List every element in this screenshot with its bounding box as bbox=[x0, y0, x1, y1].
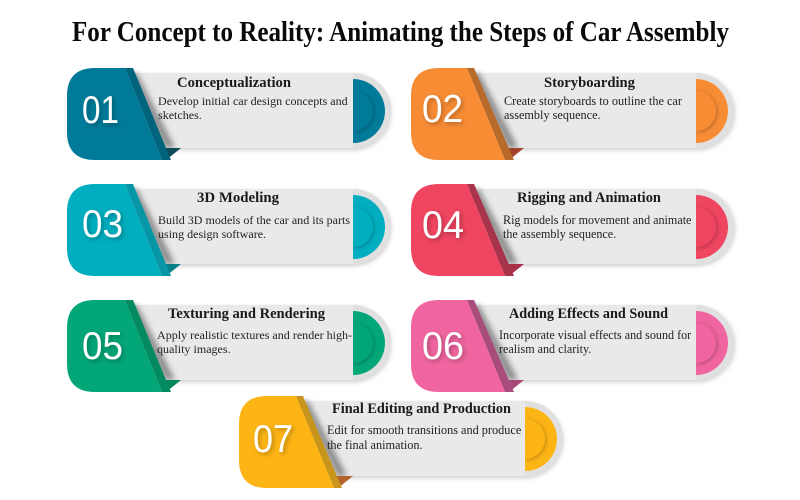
heading: Storyboarding bbox=[544, 75, 636, 91]
heading: Adding Effects and Sound bbox=[509, 306, 668, 322]
heading: Texturing and Rendering bbox=[168, 306, 326, 322]
description: sketches. bbox=[158, 108, 202, 122]
card 01: Conceptualization bbox=[67, 68, 391, 160]
card 02: Storyboarding bbox=[411, 68, 734, 160]
card 03: 3D Modeling bbox=[67, 184, 391, 276]
card 06: Adding Effects and Sound bbox=[411, 300, 734, 392]
card 05: Texturing and Rendering bbox=[67, 300, 391, 392]
step number: 03 bbox=[82, 203, 123, 246]
card 07: Final Editing and Production bbox=[239, 396, 563, 488]
card 04: Rigging and Animation bbox=[411, 184, 734, 276]
description: Build 3D models of the car and its parts bbox=[158, 213, 350, 227]
step number: 04 bbox=[422, 204, 464, 247]
step number: 01 bbox=[82, 89, 119, 132]
heading: 3D Modeling bbox=[197, 190, 280, 206]
step number: 02 bbox=[422, 88, 463, 131]
step number: 05 bbox=[82, 325, 123, 368]
step number: 07 bbox=[253, 418, 293, 461]
description: Create storyboards to outline the car bbox=[504, 94, 682, 108]
description: Incorporate visual effects and sound for bbox=[499, 328, 691, 342]
description: assembly sequence. bbox=[504, 108, 601, 122]
description: Develop initial car design concepts and bbox=[158, 94, 348, 108]
description: quality images. bbox=[157, 342, 231, 356]
step number: 06 bbox=[422, 325, 464, 368]
description: Edit for smooth transitions and produce bbox=[327, 423, 521, 437]
description: realism and clarity. bbox=[499, 342, 591, 356]
description: the final animation. bbox=[327, 438, 423, 452]
heading: Rigging and Animation bbox=[517, 190, 661, 206]
description: Apply realistic textures and render high- bbox=[157, 328, 352, 342]
heading: Final Editing and Production bbox=[332, 401, 511, 417]
heading: Conceptualization bbox=[177, 75, 291, 91]
description: Rig models for movement and animate bbox=[503, 213, 691, 227]
description: using design software. bbox=[158, 227, 266, 241]
description: the assembly sequence. bbox=[503, 227, 616, 241]
